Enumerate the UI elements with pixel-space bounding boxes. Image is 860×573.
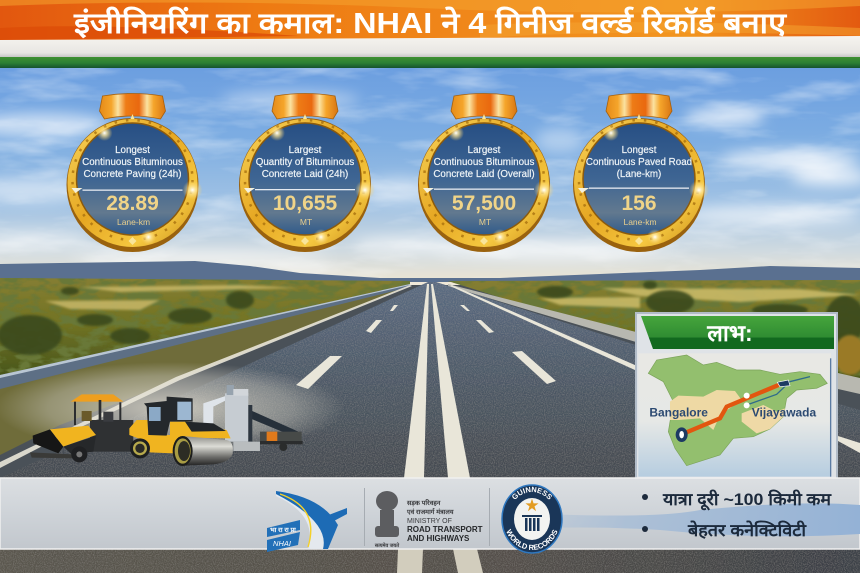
title banner bbox=[0, 0, 860, 68]
medal 2 bbox=[239, 94, 375, 252]
Guinness World Records logo: GUINNESS bbox=[512, 486, 552, 500]
medal 3 heading: Continuous Bituminous bbox=[434, 157, 534, 168]
ministry emblem and name: एवं राजमार्ग मंत्रालय bbox=[406, 508, 454, 516]
medal 2 heading: Quantity of Bituminous bbox=[256, 157, 354, 168]
ministry emblem and name bbox=[374, 491, 483, 549]
Guinness World Records logo: ★ bbox=[524, 496, 540, 515]
fields right of road bbox=[448, 280, 860, 385]
banner green stripe bbox=[0, 57, 860, 68]
ministry emblem and name: MINISTRY OF bbox=[407, 518, 452, 525]
benefit: connectivity: बेहतर कनेक्टिविटी bbox=[687, 520, 807, 540]
NHAI logo: भा रा रा प्रा bbox=[270, 527, 296, 534]
medal 1 heading: Concrete Paving (24h) bbox=[83, 169, 182, 180]
Guinness World Records logo: WORLD RECORDS bbox=[506, 528, 558, 550]
Vijayawada label: Vijayawada bbox=[752, 406, 817, 420]
medal 4 value: 156 bbox=[621, 192, 657, 215]
medal 4 heading: (Lane-km) bbox=[617, 169, 661, 180]
Guinness World Records logo bbox=[501, 484, 563, 554]
medal 1 heading: Longest bbox=[115, 145, 150, 156]
benefit: travel distance: यात्रा दूरी ~100 किमी कम bbox=[662, 489, 832, 511]
medal 3 heading: Concrete Laid (Overall) bbox=[433, 169, 535, 180]
state map shape bbox=[648, 355, 827, 466]
distant mountains bbox=[0, 261, 860, 282]
medal 4 bbox=[573, 94, 709, 252]
shoulder strip beside left barrier bbox=[0, 286, 410, 455]
route markers bbox=[676, 427, 688, 442]
road surface bbox=[0, 282, 860, 573]
medal 3 value: 57,500 bbox=[452, 192, 516, 215]
light haze behind machines bbox=[0, 362, 345, 454]
medal 4 heading: Continuous Paved Road bbox=[586, 157, 692, 168]
guard rail left bbox=[0, 284, 410, 389]
asphalt below bottom bar bbox=[0, 549, 860, 573]
ministry emblem and name: ROAD TRANSPORT bbox=[407, 525, 483, 534]
medal 1 value: 28.89 bbox=[106, 192, 159, 215]
road machinery illustration bbox=[30, 385, 303, 466]
bottom information bar bbox=[0, 477, 860, 554]
medal 2 heading: Concrete Laid (24h) bbox=[262, 169, 348, 180]
medal 4 unit: Lane-km bbox=[623, 217, 657, 227]
ministry emblem and name: AND HIGHWAYS bbox=[407, 534, 470, 543]
medal 4 heading: Longest bbox=[622, 145, 657, 156]
asphalt plant bbox=[203, 385, 303, 451]
NHAI logo bbox=[267, 491, 347, 552]
medal 1 bbox=[66, 94, 202, 252]
NHAI logo: NHAI bbox=[273, 539, 291, 548]
medal 2 heading: Largest bbox=[289, 145, 322, 156]
medal 3 bbox=[418, 94, 554, 252]
title text: इंजीनियरिंग का कमाल: NHAI ने 4 गिनीज वर्ल्ड रिकॉर्ड बनाए bbox=[73, 6, 787, 40]
sky background bbox=[0, 60, 860, 285]
road edge and lane markings bbox=[0, 284, 860, 478]
medal 3 unit: MT bbox=[479, 217, 491, 227]
medal 1 unit: Lane-km bbox=[117, 217, 150, 227]
road roller bbox=[129, 397, 233, 466]
medal 1 heading: Continuous Bituminous bbox=[82, 157, 183, 168]
medal 2 value: 10,655 bbox=[273, 192, 337, 215]
ministry emblem and name: सड़क परिवहन bbox=[406, 499, 441, 507]
benefit: connectivity bbox=[642, 520, 807, 540]
paver machine bbox=[30, 394, 133, 462]
Bangalore label: Bangalore bbox=[649, 405, 708, 419]
medal 3 heading: Largest bbox=[468, 145, 501, 156]
benefits header: लाभ: bbox=[706, 320, 753, 346]
fields left of road bbox=[0, 278, 410, 378]
benefits panel bbox=[636, 313, 837, 481]
guard rail right bbox=[448, 284, 860, 394]
medal 2 unit: MT bbox=[300, 217, 312, 227]
route line bbox=[682, 384, 780, 434]
benefits header bbox=[641, 316, 834, 349]
ministry emblem and name: सत्यमेव जयते bbox=[374, 542, 400, 549]
route map bbox=[638, 353, 831, 477]
banner white stripe bbox=[0, 36, 860, 60]
